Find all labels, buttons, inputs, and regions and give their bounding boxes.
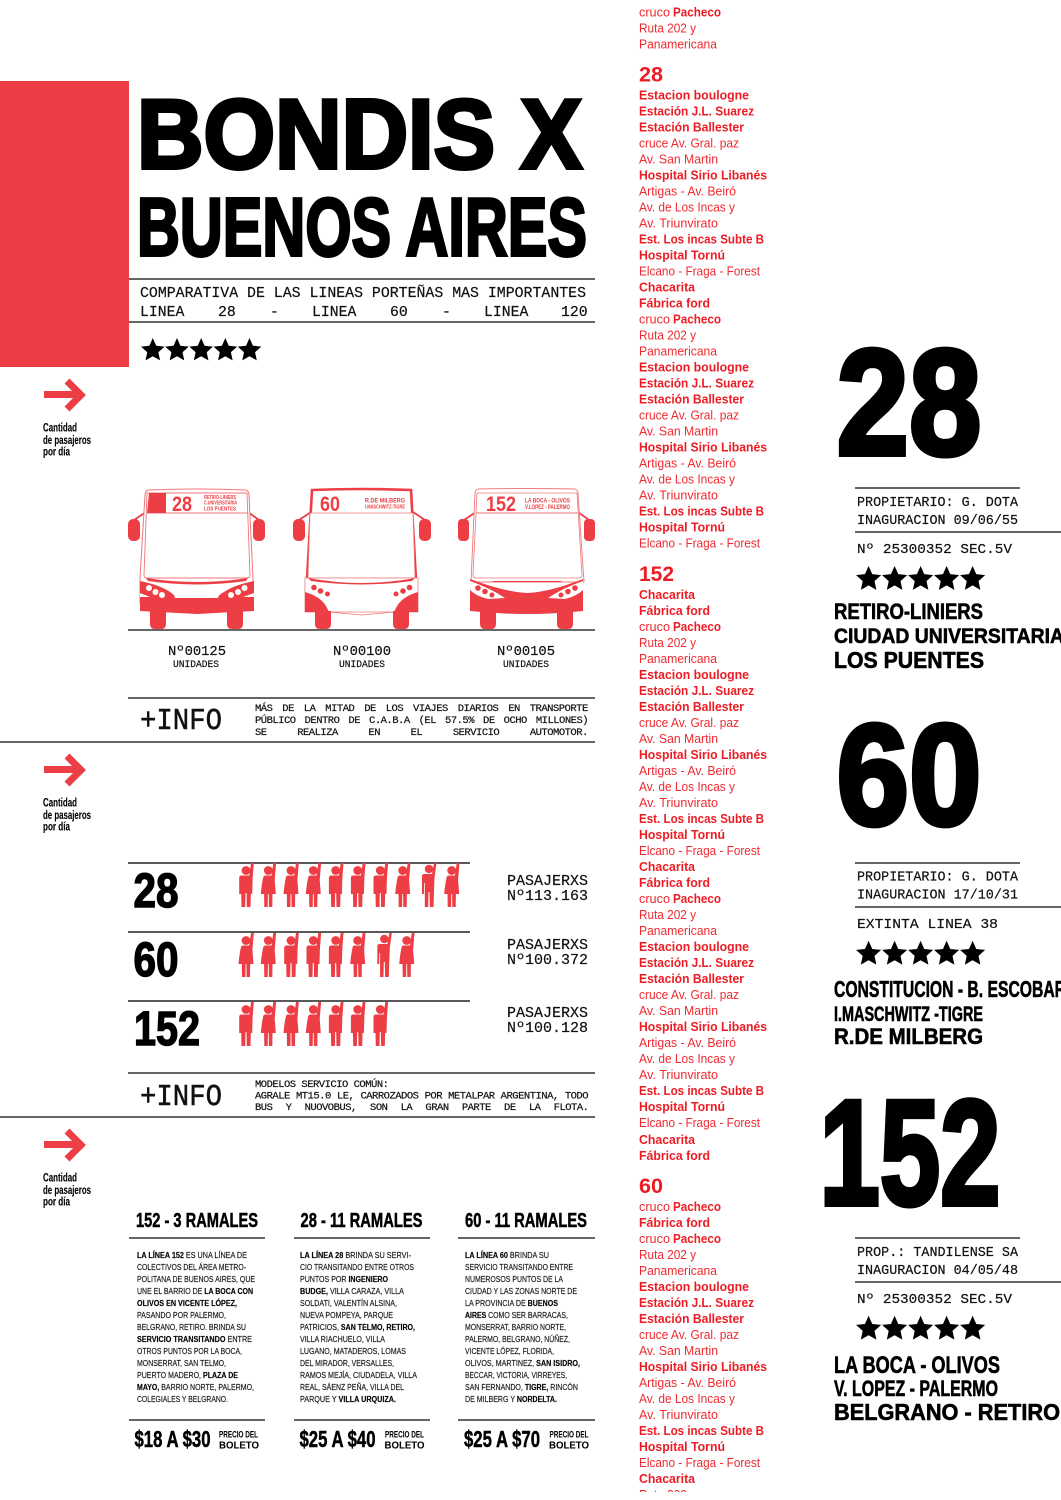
route list: 152: Estación Ballester bbox=[639, 971, 744, 986]
bus 152: LA BOCA - OLIVOS bbox=[525, 498, 570, 504]
column: 152 branches: MAYO, BARRIO NORTE, PALERMO, bbox=[137, 1382, 254, 1392]
route list: 28: Av. de Los Incas y bbox=[639, 200, 735, 215]
arrow legend 2: Cantidad bbox=[43, 798, 77, 810]
column: 60 branches: VICENTE LÓPEZ, FLORIDA, bbox=[465, 1346, 554, 1356]
arrow legend 2: de pasajeros bbox=[43, 810, 91, 822]
route list: 28: Hospital Tornú bbox=[639, 520, 725, 535]
route list: 60: Est. Los incas Subte B bbox=[639, 1423, 764, 1438]
column: 28 branches: BOLETO bbox=[384, 1440, 425, 1452]
line profile 152 bbox=[820, 1068, 1061, 1425]
route list: 152: Av. Triunvirato bbox=[639, 1067, 718, 1082]
arrow legend 2: por día bbox=[43, 822, 70, 834]
column: 152 branches: 152 - 3 RAMALES bbox=[136, 1210, 258, 1232]
route list: 28: Av. Triunvirato bbox=[639, 488, 718, 503]
line profile 28: INAGURACION 09/06/55 bbox=[857, 514, 1018, 529]
line profile 60: 60 bbox=[836, 694, 982, 856]
line profile 60 bbox=[834, 694, 1061, 1049]
column: 28 branches: SOLDATI, VALENTÍN ALSINA, bbox=[300, 1298, 397, 1308]
subtitle bbox=[129, 279, 595, 322]
route list: 152: Estación J.L. Suarez bbox=[639, 955, 754, 970]
column: 60 branches: NUMEROSOS PUNTOS DE LA bbox=[465, 1274, 563, 1284]
line profile 28: Nº 25300352 SEC.5V bbox=[857, 542, 1013, 558]
column: 28 branches: LUGANO, MATADEROS, LOMAS bbox=[300, 1346, 406, 1356]
bus 28: 28 bbox=[172, 493, 192, 516]
route list: 28: Hospital Tornú bbox=[639, 248, 725, 263]
route list: 28: Estacion boulogne bbox=[639, 88, 749, 103]
column: 28 branches: PARQUE Y VILLA URQUIZA. bbox=[300, 1394, 396, 1404]
route list: 28: Av. San Martin bbox=[639, 424, 718, 439]
red block bbox=[0, 81, 129, 367]
route list: 152: cruco bbox=[639, 619, 670, 634]
column: 60 branches: CIUDAD Y LAS ZONAS NORTE DE bbox=[465, 1286, 577, 1296]
info note 1: MÁS DE LA MITAD DE LOS VIAJES DIARIOS EN TRANSPORTE bbox=[255, 701, 588, 715]
column: 28 branches: $25 A $40 bbox=[300, 1426, 376, 1452]
column: 28 branches: LA LÍNEA 28 BRINDA SU SERVI- bbox=[300, 1250, 411, 1260]
route list: 28: Est. Los incas Subte B bbox=[639, 504, 764, 519]
title bbox=[137, 79, 587, 274]
route list: top fragment bbox=[639, 0, 721, 52]
subtitle: 60 bbox=[390, 305, 408, 321]
route list: 152: Estación J.L. Suarez bbox=[639, 683, 754, 698]
route list: 152: Estación Ballester bbox=[639, 699, 744, 714]
bus 60: I.MASCHWITZ-TIGRE bbox=[365, 504, 406, 510]
line profile 152: V. LOPEZ - PALERMO bbox=[834, 1376, 998, 1401]
line profile 152: LA BOCA - OLIVOS bbox=[834, 1352, 1000, 1379]
route list: 152: Fábrica ford bbox=[639, 1148, 710, 1163]
column: 28 branches: VILLA RIACHUELO, VILLA bbox=[300, 1334, 385, 1344]
info note 1: PÚBLICO DENTRO DE C.A.B.A (EL 57.5% DE OCHO MILLONES) bbox=[255, 713, 588, 727]
column: 28 branches: 28 - 11 RAMALES bbox=[300, 1210, 422, 1232]
subtitle: COMPARATIVA DE LAS LINEAS PORTEÑAS MAS IMPORTANTES bbox=[140, 285, 586, 302]
passengers row 28: Nº113.163 bbox=[507, 889, 588, 905]
route list: 60: Estacion boulogne bbox=[639, 1279, 749, 1294]
column: 152 branches: POLITANA DE BUENOS AIRES, QUE bbox=[137, 1274, 255, 1284]
passengers row 28 bbox=[128, 863, 588, 918]
column: 152 branches: UNE EL BARRIO DE LA BOCA CON bbox=[137, 1286, 253, 1296]
route list: 152: Elcano - Fraga - Forest bbox=[639, 843, 760, 858]
line profile 28 bbox=[834, 318, 1061, 673]
route list: 60: Hospital Tornú bbox=[639, 1439, 725, 1454]
units per line: UNIDADES bbox=[173, 659, 219, 671]
route list: 28: Elcano - Fraga - Forest bbox=[639, 264, 760, 279]
line profile 152: INAGURACION 04/05/48 bbox=[857, 1264, 1018, 1279]
column: 152 branches: BELGRANO, RETIRO. BRINDA SU bbox=[137, 1322, 246, 1332]
route list: 28: cruce Av. Gral. paz bbox=[639, 408, 739, 423]
route list: 28: Pacheco bbox=[673, 312, 721, 327]
route list: 60: Av. de Los Incas y bbox=[639, 1391, 735, 1406]
arrow legend 1: por día bbox=[43, 446, 70, 458]
route list: 60: Panamericana bbox=[639, 1263, 718, 1278]
route list: 28: Elcano - Fraga - Forest bbox=[639, 536, 760, 551]
route list: 152: Est. Los incas Subte B bbox=[639, 1083, 764, 1098]
route list: 28: Av. San Martin bbox=[639, 152, 718, 167]
passengers row 152: PASAJERXS bbox=[507, 1006, 588, 1022]
line profile 28: RETIRO-LINIERS bbox=[834, 599, 983, 624]
title: BUENOS AIRES bbox=[137, 180, 587, 274]
units per line bbox=[168, 644, 555, 671]
route list: 152: Estacion boulogne bbox=[639, 667, 749, 682]
column: 152 branches bbox=[129, 1210, 265, 1452]
passengers row 152 bbox=[128, 1001, 588, 1056]
route list: 28: Artigas - Av. Beiró bbox=[639, 184, 736, 199]
route list: 28: Av. de Los Incas y bbox=[639, 472, 735, 487]
units per line: Nº00105 bbox=[497, 644, 555, 660]
line profile 60: PROPIETARIO: G. DOTA bbox=[857, 870, 1019, 886]
route list: 60: Av. San Martin bbox=[639, 1343, 718, 1358]
route list: 28: Chacarita bbox=[639, 280, 696, 295]
subtitle: 28 bbox=[218, 305, 236, 321]
info note 2: BUS Y NUOVOBUS, SON LA GRAN PARTE DE LA FLOTA. bbox=[255, 1102, 588, 1114]
route list: 60: 60 bbox=[639, 1175, 663, 1198]
rating stars bbox=[141, 338, 261, 360]
subtitle: - bbox=[270, 305, 279, 321]
bus 28: RETIRO-LINIERS bbox=[204, 495, 237, 501]
route list: top fragment: Pacheco bbox=[673, 5, 721, 20]
route list: 152: Hospital Tornú bbox=[639, 827, 725, 842]
subtitle: LINEA bbox=[484, 305, 529, 321]
passengers row 28: 28 bbox=[134, 865, 178, 918]
column: 60 branches: LA PROVINCIA DE BUENOS bbox=[465, 1298, 558, 1308]
route list: 60 bbox=[639, 1175, 767, 1500]
title: BONDIS X bbox=[137, 79, 582, 189]
column: 152 branches: MONSERRAT, SAN TELMO, bbox=[137, 1358, 226, 1368]
route list: top fragment: cruco bbox=[639, 5, 670, 20]
route list: 152: cruce Av. Gral. paz bbox=[639, 715, 739, 730]
route list: 28: Estacion boulogne bbox=[639, 360, 749, 375]
column: 152 branches: LA LÍNEA 152 ES UNA LÍNEA DE bbox=[137, 1250, 247, 1260]
column: 28 branches: REAL, SÁENZ PEÑA, VILLA DEL bbox=[300, 1382, 404, 1392]
route list: 28: Panamericana bbox=[639, 344, 718, 359]
route list: 28: Estación Ballester bbox=[639, 120, 744, 135]
passengers row 60: 60 bbox=[134, 934, 178, 987]
info note 2: +INFO bbox=[140, 1080, 222, 1115]
route list: 152: Artigas - Av. Beiró bbox=[639, 763, 736, 778]
column: 28 branches: PATRICIOS, SAN TELMO, RETIRO, bbox=[300, 1322, 415, 1332]
route list: 152: Chacarita bbox=[639, 587, 696, 602]
line profile 28: 28 bbox=[836, 318, 982, 486]
route list: 152: Pacheco bbox=[673, 619, 721, 634]
subtitle: LINEA bbox=[312, 305, 357, 321]
route list: 60: Elcano - Fraga - Forest bbox=[639, 1455, 760, 1470]
route list: 60: cruco bbox=[639, 1199, 670, 1214]
column: 28 branches: PUNTOS POR INGENIERO bbox=[300, 1274, 388, 1284]
route list: 60: Pacheco bbox=[673, 1231, 721, 1246]
line profile 60: R.DE MILBERG bbox=[834, 1024, 983, 1049]
route list: top fragment: Panamericana bbox=[639, 37, 718, 52]
route list: 152: cruce Av. Gral. paz bbox=[639, 987, 739, 1002]
line profile 28: PROPIETARIO: G. DOTA bbox=[857, 496, 1019, 511]
bus 28: C.UNIVERSITARIA bbox=[204, 500, 237, 506]
passengers row 152: 152 bbox=[134, 1003, 200, 1056]
bus 60 bbox=[293, 489, 431, 629]
arrow legend 3: Cantidad bbox=[43, 1172, 77, 1184]
route list: 60: Chacarita bbox=[639, 1471, 696, 1486]
info note 1 bbox=[0, 698, 595, 742]
route list: 152: Av. de Los Incas y bbox=[639, 779, 735, 794]
route list: 152: Estacion boulogne bbox=[639, 939, 749, 954]
units per line: Nº00125 bbox=[168, 644, 226, 660]
arrow 1 bbox=[44, 381, 81, 409]
bus 60: 60 bbox=[320, 493, 340, 516]
route list: 60: Estación Ballester bbox=[639, 1311, 744, 1326]
column: 152 branches: OLIVOS EN VICENTE LÓPEZ, bbox=[137, 1297, 237, 1308]
arrow legend 3 bbox=[43, 1172, 91, 1208]
line profile 152: PROP.: TANDILENSE SA bbox=[857, 1246, 1019, 1261]
column: 60 branches: DE MILBERG Y NORDELTA. bbox=[465, 1394, 557, 1404]
route list: 28: Av. Triunvirato bbox=[639, 216, 718, 231]
route list: 152 bbox=[639, 563, 767, 1163]
info note 2: AGRALE MT15.0 LE, CARROZADOS POR METALPAR ARGENTINA, TODO bbox=[255, 1090, 588, 1102]
column: 28 branches: BUDGE, VILLA CARAZA, VILLA bbox=[300, 1286, 404, 1296]
units per line: Nº00100 bbox=[333, 644, 391, 660]
column: 152 branches: PUERTO MADERO, PLAZA DE bbox=[137, 1370, 238, 1380]
info note 2 bbox=[0, 1073, 595, 1117]
route list: 152: Av. San Martin bbox=[639, 731, 718, 746]
column: 60 branches: BOLETO bbox=[549, 1440, 589, 1452]
route list: 28: 28 bbox=[639, 64, 663, 87]
route list: 152: Hospital Sirio Libanés bbox=[639, 1019, 767, 1034]
subtitle: LINEA bbox=[140, 305, 185, 321]
route list: 60: Av. Triunvirato bbox=[639, 1407, 718, 1422]
route list: 152: Est. Los incas Subte B bbox=[639, 811, 764, 826]
route list: 152: Panamericana bbox=[639, 651, 718, 666]
route list: 28: Estación Ballester bbox=[639, 392, 744, 407]
column: 60 branches: PALERMO, BELGRANO, NÚÑEZ, bbox=[465, 1334, 570, 1344]
info note 2: MODELOS SERVICIO COMÚN: bbox=[255, 1077, 388, 1091]
column: 28 branches: NUEVA POMPEYA, PARQUE bbox=[300, 1310, 393, 1320]
passengers row 28: PASAJERXS bbox=[507, 874, 588, 890]
arrow 2 bbox=[44, 756, 81, 784]
column: 60 branches: 60 - 11 RAMALES bbox=[465, 1210, 587, 1232]
route list: 28: Hospital Sirio Libanés bbox=[639, 168, 767, 183]
route list: 60: Hospital Sirio Libanés bbox=[639, 1359, 767, 1374]
bus 152 bbox=[458, 488, 595, 629]
bus 152: V.LOPEZ - PALERMO bbox=[525, 505, 570, 511]
arrow legend 2 bbox=[43, 798, 91, 834]
column: 60 branches: OLIVOS, MARTINEZ, SAN ISIDRO, bbox=[465, 1358, 580, 1368]
route list: 28: Ruta 202 y bbox=[639, 328, 696, 343]
route list: 28: cruco bbox=[639, 312, 670, 327]
column: 60 branches: MONSERRAT, BARRIO NORTE, bbox=[465, 1322, 566, 1332]
column: 60 branches: LA LÍNEA 60 BRINDA SU bbox=[465, 1250, 549, 1260]
route list: 28: Hospital Sirio Libanés bbox=[639, 440, 767, 455]
route list: 152: Artigas - Av. Beiró bbox=[639, 1035, 736, 1050]
route list: 28: cruce Av. Gral. paz bbox=[639, 136, 739, 151]
line profile 152: Nº 25300352 SEC.5V bbox=[857, 1292, 1013, 1308]
column: 60 branches: BECCAR, VICTORIA, VIRREYES, bbox=[465, 1370, 567, 1380]
route list: 28 bbox=[639, 64, 767, 551]
route list: 152: Fábrica ford bbox=[639, 603, 710, 618]
subtitle: 120 bbox=[561, 305, 588, 321]
route list: 152: Elcano - Fraga - Forest bbox=[639, 1115, 760, 1130]
line profile 60: I.MASCHWITZ -TIGRE bbox=[834, 1003, 983, 1026]
passengers row 60: PASAJERXS bbox=[507, 938, 588, 954]
route list: 152: Hospital Sirio Libanés bbox=[639, 747, 767, 762]
column: 28 branches: CIO TRANSITANDO ENTRE OTROS bbox=[300, 1262, 414, 1272]
route list: 152: Ruta 202 y bbox=[639, 635, 696, 650]
line profile 60: EXTINTA LINEA 38 bbox=[857, 918, 998, 933]
route list: 28: Estación J.L. Suarez bbox=[639, 376, 754, 391]
column: 60 branches: AIRES COMO SER BARRACAS, bbox=[465, 1310, 568, 1320]
route list: 60: cruco bbox=[639, 1231, 670, 1246]
column: 28 branches bbox=[294, 1210, 430, 1452]
route list: 152: Hospital Tornú bbox=[639, 1099, 725, 1114]
route list: 152: Chacarita bbox=[639, 1132, 696, 1147]
column: 152 branches: SERVICIO TRANSITANDO ENTRE bbox=[137, 1334, 252, 1344]
bus 152: 152 bbox=[486, 493, 516, 516]
route list: 152: 152 bbox=[639, 563, 674, 586]
units per line: UNIDADES bbox=[339, 659, 385, 671]
column: 152 branches: BOLETO bbox=[219, 1440, 259, 1452]
column: 152 branches: PRECIO DEL bbox=[219, 1430, 258, 1440]
route list: 152: Fábrica ford bbox=[639, 875, 710, 890]
column: 152 branches: COLECTIVOS DEL ÁREA METRO- bbox=[137, 1262, 246, 1272]
bus 28: LOS PUENTES bbox=[204, 506, 236, 512]
route list: 152: Panamericana bbox=[639, 923, 718, 938]
subtitle: - bbox=[442, 305, 451, 321]
info note 1: SE REALIZA EN EL SERVICIO AUTOMOTOR. bbox=[255, 727, 588, 739]
column: 28 branches: PRECIO DEL bbox=[385, 1430, 424, 1440]
line profile 60: INAGURACION 17/10/31 bbox=[857, 888, 1018, 904]
info note 1: +INFO bbox=[140, 704, 222, 739]
passengers row 60 bbox=[128, 932, 588, 987]
column: 60 branches bbox=[458, 1210, 595, 1452]
column: 28 branches: DEL MIRADOR, VERSALLES, bbox=[300, 1358, 394, 1368]
route list: 152: cruco bbox=[639, 891, 670, 906]
line profile 28: LOS PUENTES bbox=[834, 647, 984, 673]
route list: 28: Artigas - Av. Beiró bbox=[639, 456, 736, 471]
passengers row 60: Nº100.372 bbox=[507, 953, 588, 969]
arrow legend 1: Cantidad bbox=[43, 422, 77, 434]
route list: 152: Chacarita bbox=[639, 859, 696, 874]
bus 28 bbox=[128, 489, 265, 629]
arrow legend 1: de pasajeros bbox=[43, 435, 91, 447]
arrow legend 3: por día bbox=[43, 1196, 70, 1208]
units per line: UNIDADES bbox=[503, 659, 549, 671]
arrow 3 bbox=[44, 1131, 81, 1159]
route list: 60: Estación J.L. Suarez bbox=[639, 1295, 754, 1310]
route list: 60: cruce Av. Gral. paz bbox=[639, 1327, 739, 1342]
column: 60 branches: SERVICIO TRANSITANDO ENTRE bbox=[465, 1262, 573, 1272]
column: 152 branches: COLEGIALES Y BELGRANO. bbox=[137, 1394, 228, 1404]
route list: 152: Pacheco bbox=[673, 891, 721, 906]
column: 152 branches: $18 A $30 bbox=[134, 1426, 210, 1452]
route list: 60: Fábrica ford bbox=[639, 1215, 710, 1230]
route list: 60: Artigas - Av. Beiró bbox=[639, 1375, 736, 1390]
route list: 60: Ruta 202 y bbox=[639, 1247, 696, 1262]
route list: 152: Ruta 202 y bbox=[639, 907, 696, 922]
passengers row 152: Nº100.128 bbox=[507, 1021, 588, 1037]
route list: 28: Est. Los incas Subte B bbox=[639, 232, 764, 247]
column: 60 branches: SAN FERNANDO, TIGRE, RINCÓN bbox=[465, 1382, 578, 1392]
arrow legend 3: de pasajeros bbox=[43, 1185, 91, 1197]
route list: top fragment: Ruta 202 y bbox=[639, 21, 696, 36]
route list: 152: Av. San Martin bbox=[639, 1003, 718, 1018]
route list: 28: Fábrica ford bbox=[639, 296, 710, 311]
column: 152 branches: OTROS PUNTOS POR LA BOCA, bbox=[137, 1346, 242, 1356]
route list: 60: Pacheco bbox=[673, 1199, 721, 1214]
column: 60 branches: PRECIO DEL bbox=[550, 1430, 589, 1440]
column: 152 branches: PASANDO POR PALERMO, bbox=[137, 1310, 226, 1320]
bus 60: R.DE MILBERG bbox=[365, 498, 405, 504]
column: 28 branches: RAMOS MEJÍA, CIUDADELA, VILLA bbox=[300, 1370, 417, 1380]
route list: 152: Av. Triunvirato bbox=[639, 795, 718, 810]
route list: 152: Av. de Los Incas y bbox=[639, 1051, 735, 1066]
arrow legend 1 bbox=[43, 422, 91, 458]
route list: 28: Estación J.L. Suarez bbox=[639, 104, 754, 119]
column: 60 branches: $25 A $70 bbox=[464, 1426, 540, 1452]
